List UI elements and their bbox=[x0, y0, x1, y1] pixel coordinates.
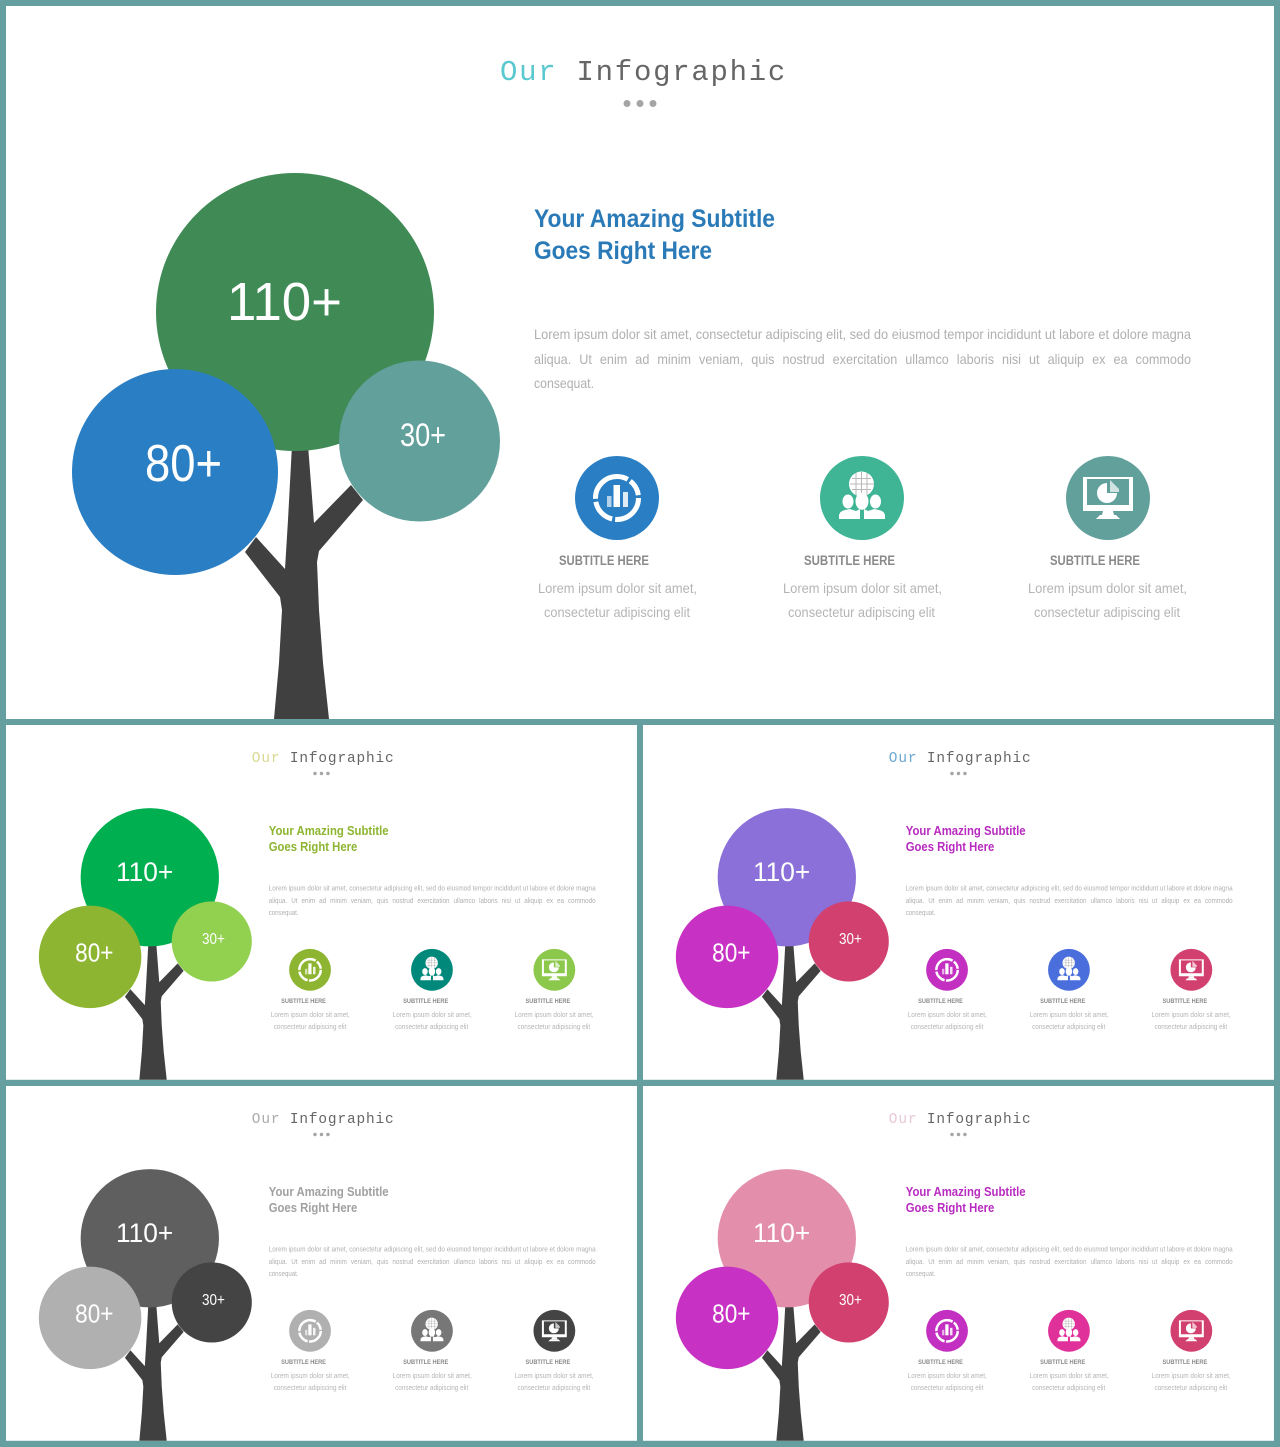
subtitle heading purple: Your Amazing Subtitle bbox=[906, 824, 1026, 838]
body paragraph pink: consequat. bbox=[906, 1271, 936, 1278]
title: Our Infographic bbox=[500, 56, 787, 89]
circle: 30+ purple bbox=[809, 901, 889, 982]
circle: 80+ green: 80+ bbox=[75, 939, 113, 967]
body paragraph: Lorem ipsum dolor sit amet, consectetur adipiscing elit, sed do eiusmod tempor incididunt ut labore et dolore magna bbox=[534, 326, 1191, 342]
feature 3: SUBTITLE HERE bbox=[1050, 553, 1140, 568]
feature 1 gray: consectetur adipiscing elit bbox=[274, 1385, 346, 1392]
circle: 110+ pink bbox=[718, 1169, 856, 1307]
panel: main slide bbox=[6, 6, 1274, 719]
body paragraph gray: Lorem ipsum dolor sit amet, consectetur adipiscing elit, sed do eiusmod tempor incididunt ut labore et dolore magna bbox=[269, 1247, 596, 1254]
circle: 110+ bbox=[156, 173, 434, 451]
tree trunk green variant bbox=[125, 943, 184, 1080]
title dots green variant bbox=[313, 772, 330, 775]
circle: 80+ purple bbox=[676, 906, 778, 1008]
circle: 80+ gray bbox=[39, 1267, 141, 1369]
subtitle heading green: Goes Right Here bbox=[269, 840, 357, 854]
body paragraph pink: aliqua. Ut enim ad minim veniam, quis nostrud exercitation ullamco laboris nisi ut aliquip ex ea commodo bbox=[906, 1259, 1233, 1266]
feature 2 purple: Lorem ipsum dolor sit amet, bbox=[1030, 1012, 1109, 1019]
body paragraph: consequat. bbox=[534, 375, 594, 391]
feature 1 gray bbox=[271, 1310, 350, 1392]
circle: 30+ gray bbox=[172, 1262, 252, 1343]
feature 3 purple: consectetur adipiscing elit bbox=[1155, 1024, 1227, 1031]
panel: purple variant bbox=[643, 725, 1274, 1080]
feature 2 green: SUBTITLE HERE bbox=[403, 998, 449, 1005]
title purple variant: Our Infographic bbox=[889, 751, 1032, 767]
title dots pink variant bbox=[950, 1133, 967, 1136]
feature 1 green: SUBTITLE HERE bbox=[281, 998, 326, 1005]
feature 3 bbox=[1028, 456, 1187, 620]
feature 2 gray: Lorem ipsum dolor sit amet, bbox=[393, 1373, 472, 1380]
feature 2 pink: SUBTITLE HERE bbox=[1040, 1359, 1086, 1366]
circle: 30+ bbox=[339, 360, 500, 522]
subtitle heading gray: Goes Right Here bbox=[269, 1201, 357, 1215]
feature 3 green: SUBTITLE HERE bbox=[525, 998, 571, 1005]
feature 1 green: consectetur adipiscing elit bbox=[274, 1024, 346, 1031]
feature 2 green: Lorem ipsum dolor sit amet, bbox=[393, 1012, 472, 1019]
feature 2 green: consectetur adipiscing elit bbox=[395, 1024, 468, 1031]
feature 3 gray: SUBTITLE HERE bbox=[525, 1359, 571, 1366]
tree trunk purple variant bbox=[762, 943, 821, 1080]
body paragraph gray: consequat. bbox=[269, 1271, 299, 1278]
circle: 80+ green bbox=[39, 906, 141, 1008]
tree trunk pink variant bbox=[762, 1304, 821, 1441]
feature 1: Lorem ipsum dolor sit amet, bbox=[538, 580, 697, 596]
body paragraph pink: Lorem ipsum dolor sit amet, consectetur adipiscing elit, sed do eiusmod tempor incididunt ut labore et dolore magna bbox=[906, 1247, 1233, 1254]
feature 2: consectetur adipiscing elit bbox=[788, 604, 935, 620]
feature 1 gray: Lorem ipsum dolor sit amet, bbox=[271, 1373, 350, 1380]
tree trunk bbox=[245, 445, 363, 719]
feature 1 green: Lorem ipsum dolor sit amet, bbox=[271, 1012, 350, 1019]
feature 2 gray: consectetur adipiscing elit bbox=[395, 1385, 468, 1392]
feature 2 pink: Lorem ipsum dolor sit amet, bbox=[1030, 1373, 1109, 1380]
feature 3 pink bbox=[1152, 1310, 1231, 1392]
circle: 110+ gray: 110+ bbox=[116, 1218, 173, 1248]
feature 1: SUBTITLE HERE bbox=[559, 553, 649, 568]
circle: 110+ gray bbox=[81, 1169, 219, 1307]
subtitle heading pink: Goes Right Here bbox=[906, 1201, 994, 1215]
feature 2 pink: consectetur adipiscing elit bbox=[1032, 1385, 1105, 1392]
feature 2 purple: consectetur adipiscing elit bbox=[1032, 1024, 1105, 1031]
feature 3 purple bbox=[1152, 949, 1231, 1031]
feature 3: consectetur adipiscing elit bbox=[1034, 604, 1180, 620]
circle: 30+ pink: 30+ bbox=[839, 1292, 862, 1309]
panel: gray variant bbox=[6, 1086, 637, 1441]
circle: 30+: 30+ bbox=[400, 417, 446, 453]
circle: 80+ purple: 80+ bbox=[712, 939, 750, 967]
circle: 30+ pink bbox=[809, 1262, 889, 1343]
panel: green variant bbox=[6, 725, 637, 1080]
body paragraph green: consequat. bbox=[269, 910, 299, 917]
feature 3 green bbox=[515, 949, 594, 1031]
body paragraph gray: aliqua. Ut enim ad minim veniam, quis nostrud exercitation ullamco laboris nisi ut aliquip ex ea commodo bbox=[269, 1259, 596, 1266]
feature 3 pink: Lorem ipsum dolor sit amet, bbox=[1152, 1373, 1231, 1380]
feature 2 pink bbox=[1030, 1310, 1109, 1392]
circle: 110+ green bbox=[81, 808, 219, 946]
circle: 80+ gray: 80+ bbox=[75, 1300, 113, 1328]
circle: 80+: 80+ bbox=[145, 435, 222, 493]
body paragraph purple: aliqua. Ut enim ad minim veniam, quis nostrud exercitation ullamco laboris nisi ut aliquip ex ea commodo bbox=[906, 898, 1233, 905]
body paragraph: aliqua. Ut enim ad minim veniam, quis nostrud exercitation ullamco laboris nisi ut aliquip ex ea commodo bbox=[534, 351, 1191, 367]
circle: 80+ bbox=[72, 369, 278, 575]
feature 3 green: Lorem ipsum dolor sit amet, bbox=[515, 1012, 594, 1019]
panel: pink variant bbox=[643, 1086, 1274, 1441]
subtitle heading gray: Your Amazing Subtitle bbox=[269, 1185, 389, 1199]
feature 1 pink bbox=[908, 1310, 987, 1392]
feature 2 green bbox=[393, 949, 472, 1031]
feature 3 gray: Lorem ipsum dolor sit amet, bbox=[515, 1373, 594, 1380]
feature 2: Lorem ipsum dolor sit amet, bbox=[783, 580, 942, 596]
title dots purple variant bbox=[950, 772, 967, 775]
title pink variant: Our Infographic bbox=[889, 1112, 1032, 1128]
circle: 30+ green: 30+ bbox=[202, 931, 225, 948]
feature 2 bbox=[783, 456, 942, 620]
feature 1: consectetur adipiscing elit bbox=[544, 604, 690, 620]
feature 1 pink: consectetur adipiscing elit bbox=[911, 1385, 983, 1392]
feature 3 green: consectetur adipiscing elit bbox=[518, 1024, 590, 1031]
feature 1 green bbox=[271, 949, 350, 1031]
circle: 30+ green bbox=[172, 901, 252, 982]
feature 1 purple bbox=[908, 949, 987, 1031]
feature 1 purple: consectetur adipiscing elit bbox=[911, 1024, 983, 1031]
subtitle heading purple: Goes Right Here bbox=[906, 840, 994, 854]
feature 1 bbox=[538, 456, 697, 620]
feature 2 purple bbox=[1030, 949, 1109, 1031]
subtitle heading: Goes Right Here bbox=[534, 237, 712, 265]
circle: 110+ purple bbox=[718, 808, 856, 946]
feature 2 gray: SUBTITLE HERE bbox=[403, 1359, 449, 1366]
subtitle heading pink: Your Amazing Subtitle bbox=[906, 1185, 1026, 1199]
feature 3 purple: Lorem ipsum dolor sit amet, bbox=[1152, 1012, 1231, 1019]
feature 2: SUBTITLE HERE bbox=[804, 553, 895, 568]
feature 1 purple: SUBTITLE HERE bbox=[918, 998, 963, 1005]
title gray variant: Our Infographic bbox=[252, 1112, 395, 1128]
feature 3 gray: consectetur adipiscing elit bbox=[518, 1385, 590, 1392]
circle: 110+ green: 110+ bbox=[116, 857, 173, 887]
feature 1 pink: SUBTITLE HERE bbox=[918, 1359, 963, 1366]
title dots bbox=[624, 100, 656, 107]
circle: 30+ gray: 30+ bbox=[202, 1292, 225, 1309]
circle: 110+: 110+ bbox=[227, 272, 342, 332]
feature 3 gray bbox=[515, 1310, 594, 1392]
feature 3 pink: consectetur adipiscing elit bbox=[1155, 1385, 1227, 1392]
circle: 80+ pink bbox=[676, 1267, 778, 1369]
feature 3 pink: SUBTITLE HERE bbox=[1162, 1359, 1208, 1366]
title dots gray variant bbox=[313, 1133, 330, 1136]
subtitle heading green: Your Amazing Subtitle bbox=[269, 824, 389, 838]
circle: 80+ pink: 80+ bbox=[712, 1300, 750, 1328]
body paragraph green: Lorem ipsum dolor sit amet, consectetur adipiscing elit, sed do eiusmod tempor incididunt ut labore et dolore magna bbox=[269, 886, 596, 893]
feature 2 gray bbox=[393, 1310, 472, 1392]
title green variant: Our Infographic bbox=[252, 751, 395, 767]
circle: 30+ purple: 30+ bbox=[839, 931, 862, 948]
circle: 110+ pink: 110+ bbox=[753, 1218, 810, 1248]
body paragraph purple: Lorem ipsum dolor sit amet, consectetur adipiscing elit, sed do eiusmod tempor incididunt ut labore et dolore magna bbox=[906, 886, 1233, 893]
feature 2 purple: SUBTITLE HERE bbox=[1040, 998, 1086, 1005]
feature 1 pink: Lorem ipsum dolor sit amet, bbox=[908, 1373, 987, 1380]
body paragraph green: aliqua. Ut enim ad minim veniam, quis nostrud exercitation ullamco laboris nisi ut aliquip ex ea commodo bbox=[269, 898, 596, 905]
subtitle heading: Your Amazing Subtitle bbox=[534, 205, 775, 233]
feature 1 purple: Lorem ipsum dolor sit amet, bbox=[908, 1012, 987, 1019]
tree trunk gray variant bbox=[125, 1304, 184, 1441]
circle: 110+ purple: 110+ bbox=[753, 857, 810, 887]
feature 3: Lorem ipsum dolor sit amet, bbox=[1028, 580, 1187, 596]
feature 3 purple: SUBTITLE HERE bbox=[1162, 998, 1208, 1005]
body paragraph purple: consequat. bbox=[906, 910, 936, 917]
feature 1 gray: SUBTITLE HERE bbox=[281, 1359, 326, 1366]
